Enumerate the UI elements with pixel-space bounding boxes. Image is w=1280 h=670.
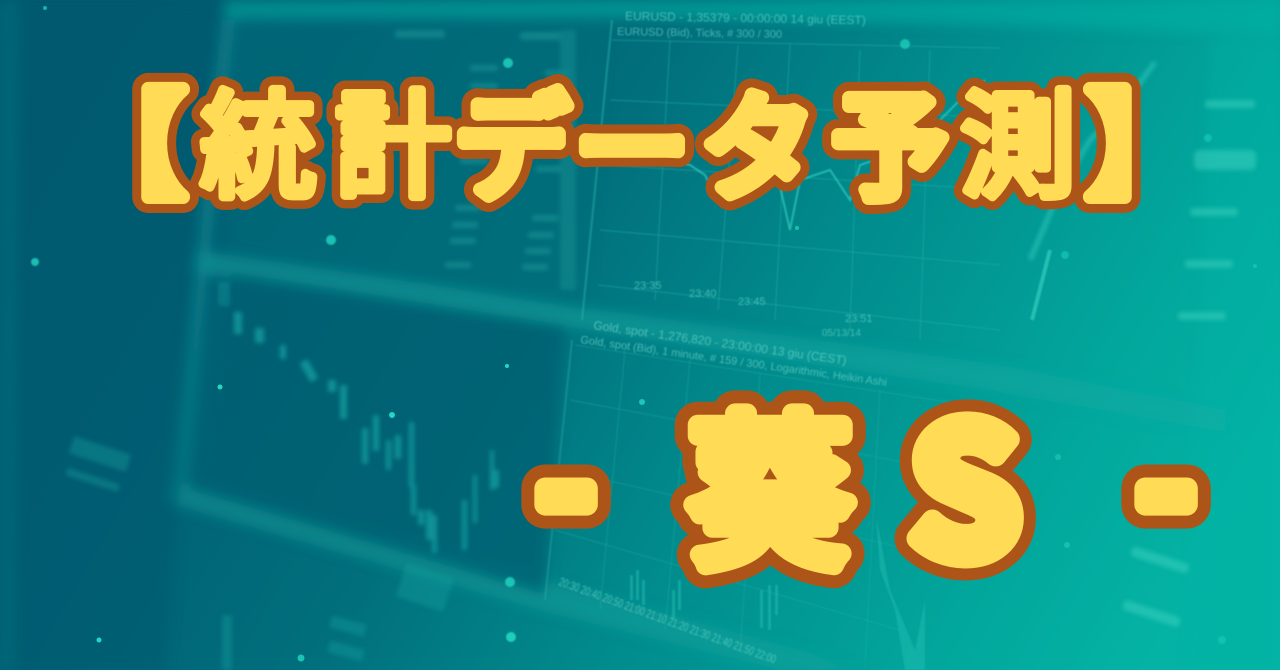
title fill: 計 — [335, 53, 451, 221]
background: lower left candlestick chart — [218, 282, 499, 553]
author name fill: - — [1138, 364, 1194, 584]
title outline: 統 — [200, 53, 316, 221]
background: upper chart labels: 23:45 — [738, 296, 766, 308]
author name outline: - — [1138, 364, 1194, 584]
background: upper chart labels: 23:35 — [634, 280, 662, 292]
title fill: デ — [454, 55, 570, 223]
author name — [538, 351, 1194, 606]
background: upper chart labels: EURUSD - 1,35379 - 00:00:00 14 giu (EEST) — [625, 9, 866, 27]
background: lower chart labels: Gold, spot - 1,276,820 - 23:00:00 13 giu (CEST) — [593, 318, 848, 368]
title outline: 予 — [832, 55, 948, 223]
title fill: ー — [574, 56, 690, 224]
background: upper chart labels: 23:51 — [845, 313, 873, 325]
background: upper left data table — [395, 30, 576, 290]
background: lower chart labels — [557, 318, 888, 667]
title outline: 計 — [335, 53, 451, 221]
title — [71, 53, 1202, 224]
author name fill: 葵 — [688, 361, 852, 600]
background: upper chart labels: 23:40 — [689, 288, 717, 300]
author name outline: - — [538, 364, 594, 584]
background: lower chart grid — [545, 340, 1000, 668]
title fill: タ — [700, 55, 816, 223]
author name outline — [538, 351, 1194, 606]
title fill: 予 — [832, 55, 948, 223]
background: lower left data rows — [65, 436, 454, 670]
background: upper chart labels: EURUSD (Bid), Ticks, # 300 / 300 — [617, 26, 782, 41]
title outline — [71, 53, 1202, 224]
title outline: ー — [574, 56, 690, 224]
background: right axis labels — [1122, 100, 1256, 628]
title fill: 測 — [960, 53, 1076, 221]
title outline: タ — [700, 55, 816, 223]
background: upper right price line — [612, 62, 1155, 320]
author name fill: S — [910, 351, 1020, 606]
title outline: 測 — [960, 53, 1076, 221]
title fill: 統 — [200, 53, 316, 221]
background: upper right chart grid — [582, 20, 1000, 340]
background: upper chart labels — [617, 9, 873, 339]
title fill: 】 — [1086, 53, 1202, 221]
title fill: 【 — [71, 53, 187, 221]
background: upper chart labels: 05/13/14 — [822, 328, 861, 339]
title outline: 】 — [1086, 53, 1202, 221]
author name fill: - — [538, 364, 594, 584]
author name outline: 葵 — [688, 361, 852, 600]
title outline: 【 — [71, 53, 187, 221]
title outline: デ — [454, 55, 570, 223]
author name outline: S — [910, 351, 1020, 606]
title fill — [71, 53, 1202, 224]
background: lower centre price bars — [630, 515, 925, 670]
author name fill — [538, 351, 1194, 606]
background: lower chart labels: Gold, spot (Bid), 1 minute, # 159 / 300, Logarithmic, Heikin Ashi — [580, 334, 888, 389]
